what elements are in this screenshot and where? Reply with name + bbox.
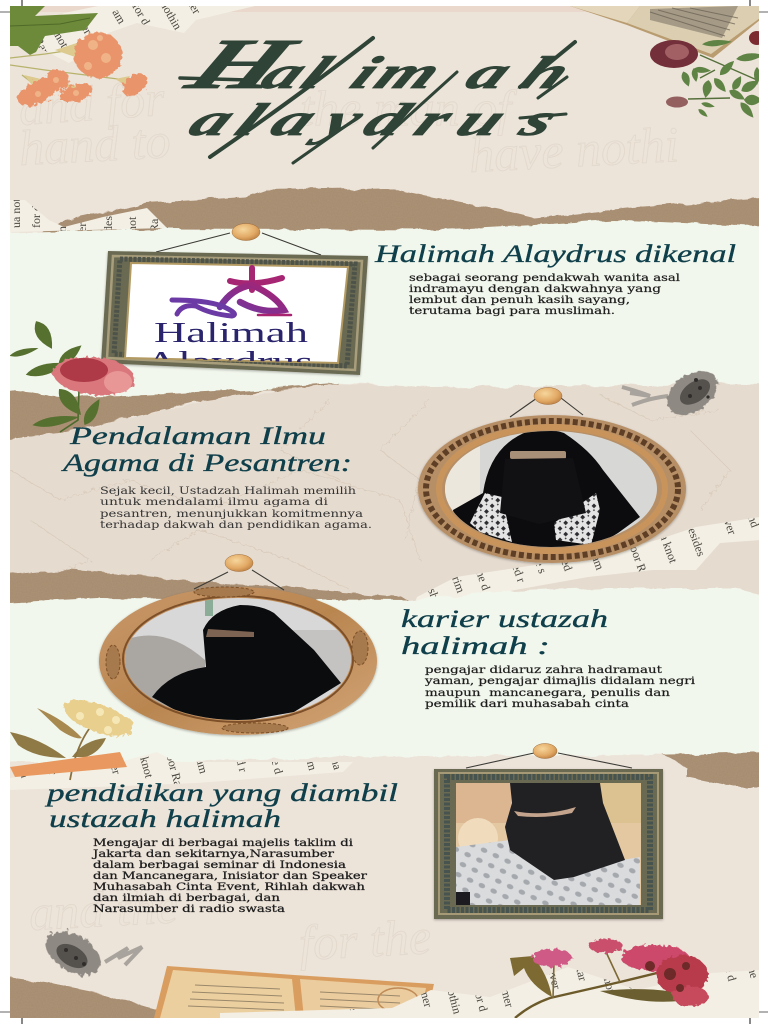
text: have nothi [468, 116, 680, 183]
hanging frame 1 with logo [101, 224, 368, 378]
title: m [365, 47, 452, 98]
newsprint scrap top left: Rar [31, 35, 52, 57]
text: and for [17, 70, 167, 136]
pin 3 [225, 554, 253, 572]
title: y [305, 94, 375, 145]
text: and the [28, 877, 179, 941]
newsprint strip right [416, 517, 759, 601]
body 3: maupun mancanegara, penulis dan [425, 688, 671, 699]
newsprint strip right: ever [719, 512, 739, 536]
torn kraft strip 4 [662, 751, 759, 788]
body 2: terhadap dakwah dan pendidikan agama. [100, 520, 372, 531]
dried yellow flower with tape [10, 693, 137, 780]
body 3: pengajar didaruz zahra hadramaut [425, 665, 662, 676]
pin 4 [533, 744, 557, 758]
newsprint strip bottom: e d [722, 965, 739, 983]
heading 1: Halimah Alaydrus dikenal [374, 241, 736, 268]
text: have [557, 809, 655, 871]
text: hand to [18, 112, 172, 176]
body 1: indramayu dengan dakwahnya yang [409, 284, 662, 295]
newsprint scrap upper left: ua nothi [9, 188, 23, 228]
newsprint strip right: poor Ra [625, 538, 652, 580]
title: s [510, 94, 569, 145]
title: a [252, 47, 318, 98]
body 3: yaman, pengajar dimajlis didalam negri [424, 676, 695, 687]
newsprint strip right: a knot [657, 532, 681, 566]
moth bottom left [45, 928, 144, 978]
newsprint strip lower left: poor Ra [162, 747, 186, 788]
moth top right [622, 370, 720, 416]
logo mark [172, 268, 291, 316]
heading 4: pendidikan yang diambil [44, 780, 398, 807]
newsprint strip bottom [220, 962, 762, 1018]
body 1: sebagai seorang pendakwah wanita asal [409, 273, 680, 284]
heading 4: ustazah halimah [49, 806, 281, 833]
pin 2 [534, 388, 562, 404]
open book top right [570, 6, 760, 58]
heading 4 [44, 780, 398, 833]
portrait 3 [152, 605, 341, 725]
title: i [341, 47, 391, 98]
newsprint strip right: besides [683, 520, 709, 559]
newsprint strip bottom: nothin [443, 982, 465, 1015]
title: a [180, 94, 246, 145]
newsprint scrap top left: for d [129, 0, 153, 27]
oval frame 3 with portrait [99, 554, 377, 735]
logo text: Halimah [154, 317, 309, 349]
green paper section 2 [0, 588, 768, 762]
newsprint strip bottom: poor [622, 969, 641, 994]
newsprint strip right: and [743, 508, 762, 529]
title: l [226, 94, 276, 145]
newsprint scrap upper left: nc [55, 221, 69, 232]
newsprint scrap top left: der [75, 16, 95, 37]
torn kraft strip 2 [0, 380, 340, 440]
newsprint scrap top left: am [109, 6, 129, 27]
logo text [155, 322, 310, 362]
title: r [405, 94, 465, 145]
newsprint strip lower left: sha [327, 752, 345, 772]
body 2: pesantren, menunjukkan komitmennya [100, 509, 363, 520]
body 4 [92, 838, 367, 915]
rose mid left [9, 318, 137, 432]
newsprint strip lower left: rim [302, 752, 320, 773]
title: u [447, 94, 517, 145]
newsprint strip bottom: for d [471, 987, 491, 1013]
pin 1 [232, 224, 260, 240]
newsprint strip right: he d [473, 568, 493, 592]
newsprint strip right: sha [425, 586, 444, 607]
body 2 [100, 486, 372, 531]
newsprint strip lower left: fo [79, 757, 95, 770]
body 4: Mengajar di berbagai majelis taklim di [93, 838, 353, 849]
newsprint strip lower left: wa [15, 762, 32, 780]
newsprint strip right: led [557, 554, 575, 573]
heading 3 [401, 606, 608, 660]
title [178, 36, 578, 165]
newsprint scrap upper left [10, 200, 166, 232]
portrait 2 [453, 430, 640, 550]
newsprint scrap top left [38, 6, 254, 63]
newsprint strip lower left: ed r [232, 752, 250, 773]
newsprint strip lower left: he d [267, 752, 286, 775]
green paper section 1 [0, 220, 768, 397]
body 4: Muhasabah Cinta Event, Rihlah dakwah [93, 882, 366, 893]
pressed flower bottom right [510, 939, 708, 1018]
body 2: untuk mendalami ilmu agama di [100, 497, 328, 508]
section 3 text [401, 606, 695, 710]
newsprint strip bottom: Rar [572, 962, 590, 983]
square frame 4 with portrait [434, 744, 663, 919]
newsprint scrap upper left: des [101, 216, 115, 232]
title: a [457, 47, 523, 98]
title: h [511, 47, 581, 98]
flowers top left [10, 6, 152, 111]
body 4: dalam berbagai seminar di Indonesia [93, 860, 346, 871]
logo text: Alaydrus [145, 346, 313, 378]
title: d [354, 94, 421, 145]
heading 2: Agama di Pesantren: [60, 450, 352, 477]
newsprint strip bottom: amer [497, 982, 517, 1009]
newsprint strip bottom: he [745, 965, 762, 980]
newsprint scrap top left: Knot [47, 22, 72, 51]
newsprint strip lower left: ever [105, 752, 124, 776]
newsprint scrap upper left: er [75, 223, 89, 232]
newsprint scrap upper left: for d [29, 205, 43, 228]
heading 2 [60, 423, 352, 477]
text: the man of [300, 80, 517, 136]
body 2: Sejak kecil, Ustadzah Halimah memilih [100, 486, 357, 497]
body 3 [424, 665, 695, 710]
torn kraft strip 1 [42, 187, 759, 233]
newsprint scrap upper left: not [125, 216, 139, 232]
portrait 4 [456, 840, 640, 905]
newsprint scrap upper left: Ra [147, 218, 161, 232]
body 1: terutama bagi para muslimah. [409, 306, 615, 317]
open book bottom [154, 966, 434, 1018]
section 1 text [374, 241, 736, 317]
title: a [261, 94, 328, 145]
newsprint strip lower left [10, 752, 352, 790]
rose top right [650, 31, 765, 120]
body 3: pemilik dari muhasabah cinta [425, 699, 629, 710]
body 4: Narasumber di radio swasta [93, 904, 285, 915]
newsprint strip bottom: a knot [597, 962, 618, 995]
bottom-left kraft corner [10, 976, 156, 1018]
section 2 text [60, 423, 372, 531]
newsprint strip lower left: for [43, 759, 60, 776]
title: l [292, 47, 342, 98]
torn kraft strip 3 [10, 568, 408, 604]
newsprint strip bottom: mer [417, 987, 435, 1009]
newsprint strip right: ed r [509, 562, 529, 584]
marble paper section [0, 383, 768, 610]
newsprint strip bottom: ever [545, 967, 564, 991]
newsprint strip lower left: a knot [135, 747, 156, 780]
newsprint strip bottom: re [345, 999, 361, 1012]
newsprint strip lower left: cam [192, 752, 211, 776]
newsprint strip right: cam [587, 548, 607, 572]
body 4: dan Mancanegara, Inisiator dan Speaker [93, 871, 367, 882]
oval frame 2 with portrait [418, 388, 686, 563]
section 4 text [44, 780, 398, 915]
title: H [172, 23, 313, 104]
heading 3: karier ustazah [401, 606, 608, 633]
newsprint strip right: rim [449, 574, 468, 595]
body 4: dan ilmiah di berbagai, dan [93, 893, 281, 904]
newsprint strip right: e s [532, 558, 550, 576]
body 4: Jakarta dan sekitarnya,Narasumber [92, 849, 334, 860]
text: for the [298, 908, 432, 971]
heading 3: halimah : [401, 633, 550, 660]
body 1: lembut dan penuh kasih sayang, [409, 295, 630, 306]
heading 2: Pendalaman Ilmu [69, 423, 326, 450]
body 1 [409, 273, 680, 317]
